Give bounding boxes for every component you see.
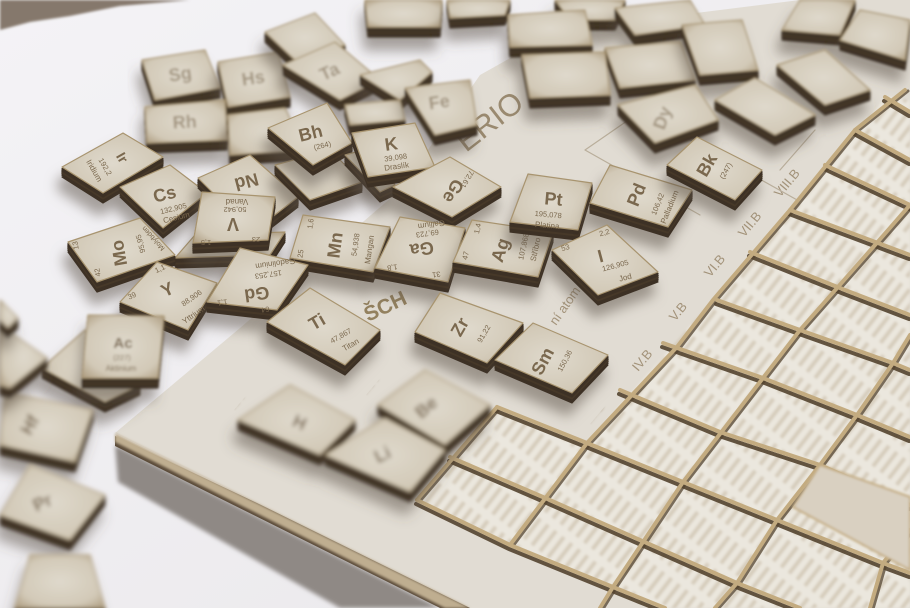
tile Zr <box>415 293 523 363</box>
tile upper left 3 <box>265 13 345 62</box>
tile Ti <box>267 288 380 365</box>
tile Bk: (247) <box>718 160 734 181</box>
tile Mn <box>290 215 390 272</box>
tile Ti: Titan <box>341 337 361 353</box>
tile Sm: 150,36 <box>555 349 574 373</box>
tile upper mid 1 <box>360 60 432 100</box>
tile Ag: 1,4 <box>472 222 483 235</box>
tile Ga: 31 <box>432 269 441 280</box>
heading fragment ERIO: ERIO <box>449 84 530 159</box>
foreground blurred tiles <box>0 300 490 608</box>
tile I: 2,2 <box>598 227 611 238</box>
tile Pr <box>0 465 105 540</box>
tile top 5 <box>615 0 705 35</box>
tile Nd: Nd <box>232 169 261 195</box>
tile Mn: 54,938 <box>349 233 362 257</box>
board lettering <box>225 84 803 426</box>
tile behind K <box>345 148 395 192</box>
tile Mo <box>68 218 175 282</box>
tile Pr: Pr <box>30 489 55 516</box>
tile K: 39,098 <box>384 151 408 164</box>
tile I: I <box>595 246 605 267</box>
group label III.B: III.B <box>581 399 607 426</box>
tile K <box>352 123 435 177</box>
group label VIII.B: VIII.B <box>771 166 803 200</box>
tile Ge: Ge <box>439 176 468 206</box>
printed cell text area <box>417 97 910 608</box>
tile Mn: Mn <box>323 231 347 259</box>
tile Ac: (227) <box>113 353 131 362</box>
tile upper left 4 <box>283 42 380 100</box>
thin engraved legend box <box>585 112 815 215</box>
tile left edge <box>0 325 47 388</box>
tile Mo: 13 <box>70 241 81 250</box>
tile Bk: Bk <box>692 149 722 180</box>
tile Sm <box>495 323 608 393</box>
tile Y: Y <box>158 278 177 301</box>
tile I: 53 <box>560 242 571 253</box>
tile Cs: Cesium <box>162 210 191 225</box>
tile Li: Li <box>371 442 394 467</box>
tile Y <box>120 262 217 330</box>
tile mid left <box>145 100 227 143</box>
tile under Bh <box>228 108 305 155</box>
tile Hf <box>0 392 93 462</box>
tile Pd: 106,42 <box>649 192 666 216</box>
tile Ge: 72,61 <box>459 169 476 190</box>
tile Bh <box>268 103 352 165</box>
tile Pt <box>510 174 592 231</box>
tile Ge <box>393 157 501 217</box>
tile H: H <box>289 411 310 434</box>
tile Gd: Gd <box>243 282 271 306</box>
tile Y: 88,906 <box>180 288 204 308</box>
tile Pd: Palladium <box>659 189 681 225</box>
tile top 13: Dy <box>649 104 676 132</box>
tile Cs: 132,905 <box>159 201 188 216</box>
tile Y: 1,1 <box>153 262 167 275</box>
tile under Ac <box>42 330 140 402</box>
tile Pt: Platina <box>535 220 560 231</box>
tile top 1 <box>365 0 442 27</box>
tile Ga: 1,8 <box>387 262 398 273</box>
tile Bh: Bh <box>296 121 325 146</box>
tile top 13 <box>618 85 718 143</box>
group label VII.B: VII.B <box>735 209 764 240</box>
tile Ir: 192,2 <box>97 156 114 177</box>
tile V: 1,5 <box>201 238 211 247</box>
tile Ge pile <box>275 150 362 200</box>
group label IV.B: IV.B <box>629 346 655 374</box>
tile Pd <box>590 165 692 227</box>
tile upper left 1: Sg <box>167 63 193 86</box>
tile top 7 <box>682 20 758 75</box>
tile Bk <box>667 137 762 200</box>
caption atom: ní atom <box>546 284 583 328</box>
tile Zr: 91,22 <box>475 323 492 344</box>
tile Mo: 95,95 <box>134 233 147 254</box>
tile Mn: 25 <box>295 249 306 258</box>
tile K: K <box>383 133 399 155</box>
tile Mo: Mo <box>107 239 131 268</box>
heading fragment SCH: ŠCH <box>360 286 410 327</box>
tile Ac <box>82 315 164 378</box>
tile H <box>238 385 355 455</box>
tile upper left 4: Ta <box>316 58 343 85</box>
tile Bh: (264) <box>313 139 332 152</box>
tile Sm: Sm <box>527 344 558 378</box>
tile Nd <box>198 155 298 225</box>
tile Ga <box>375 217 465 282</box>
blank tile in grid <box>793 465 910 570</box>
tile Hf: Hf <box>16 411 44 438</box>
tile I: Jod <box>618 272 633 284</box>
tile left small <box>0 300 18 328</box>
tile Mo: 42 <box>92 268 103 277</box>
tile Cs <box>120 165 207 228</box>
tile Ga: 69,723 <box>415 227 439 240</box>
tile top 2 <box>447 0 510 18</box>
tile Y: Yttrium <box>181 304 207 326</box>
tile upper left 2 <box>218 52 290 107</box>
tile Gd: 1,1 <box>217 297 228 308</box>
tile Mo: Molybden <box>141 224 167 252</box>
in-focus tiles <box>62 103 762 393</box>
tile V <box>193 192 275 247</box>
tile Ag <box>453 220 553 277</box>
tile top 6 <box>605 42 695 88</box>
tile Ag: Stříbro <box>529 236 543 262</box>
tile Ac: Ac <box>113 335 133 352</box>
tile Gd: 157,253 <box>254 268 282 281</box>
tile top 4 <box>508 10 592 47</box>
tile upper left 1 <box>142 50 220 100</box>
tile top 3 <box>555 0 625 20</box>
group label VI.B: VI.B <box>701 251 728 280</box>
tile Gd <box>207 248 308 315</box>
tile V: 23 <box>252 235 260 244</box>
group label I.A: I.A <box>225 390 247 412</box>
tile V: Vanad <box>226 197 248 206</box>
tile V: 50,942 <box>224 205 246 214</box>
tile V: V <box>227 214 239 234</box>
tile Gd: Gadolinium <box>254 256 296 271</box>
tile I <box>552 225 658 295</box>
Ac tile stack <box>42 315 164 402</box>
tile Be <box>378 370 490 445</box>
tile Li <box>325 418 445 492</box>
tile Ir <box>62 133 163 193</box>
tile top 11 <box>777 50 870 105</box>
tile upper mid 2 <box>345 100 405 125</box>
tile bottom <box>15 555 105 608</box>
tile Mn: Mangan <box>363 235 376 265</box>
tile upper left 2: Hs <box>240 67 266 90</box>
group label II.A: II.A <box>357 372 381 397</box>
tile Gd: 64 <box>261 304 270 315</box>
far background tiles <box>142 0 910 155</box>
tile Ti: 47,867 <box>329 326 353 345</box>
tile Ag: 47 <box>460 250 471 260</box>
tile Pt: 195,078 <box>534 209 562 220</box>
tile Ir: Iridium <box>84 158 104 184</box>
tile Ac: Aktinium <box>106 364 137 373</box>
tile Ir: Ir <box>113 149 132 166</box>
tile Ga: Gallium <box>417 218 445 231</box>
tile Ag: Ag <box>487 236 514 265</box>
tile Ti: Ti <box>305 309 329 334</box>
tile top 8 <box>522 52 610 98</box>
tile Cs: Cs <box>151 182 178 207</box>
tile I: 126,905 <box>601 258 630 273</box>
tile top 9 <box>782 0 855 35</box>
tile upper mid 3: Fe <box>427 91 451 113</box>
tile Mn: 1,6 <box>305 218 316 229</box>
board shadow <box>115 445 440 608</box>
tile Ag: 107,868 <box>516 232 531 261</box>
element grid <box>416 90 910 608</box>
tile Pd: Pd <box>623 180 650 209</box>
tile mid left: Rh <box>172 111 197 133</box>
group label V.B: V.B <box>666 299 690 324</box>
tile Be: Be <box>411 392 441 422</box>
tile Pt: Pt <box>544 188 563 210</box>
dark corner at top left <box>0 0 190 30</box>
tile lower left of V <box>175 232 285 258</box>
tile upper mid 3 <box>405 80 477 135</box>
tile top 10 <box>840 10 910 60</box>
tile Ga: Ga <box>408 237 435 261</box>
tile Y: 39 <box>126 290 138 302</box>
tile K: Draslík <box>384 160 411 173</box>
tile Zr: Zr <box>447 314 473 340</box>
tile top 12 <box>715 78 815 135</box>
